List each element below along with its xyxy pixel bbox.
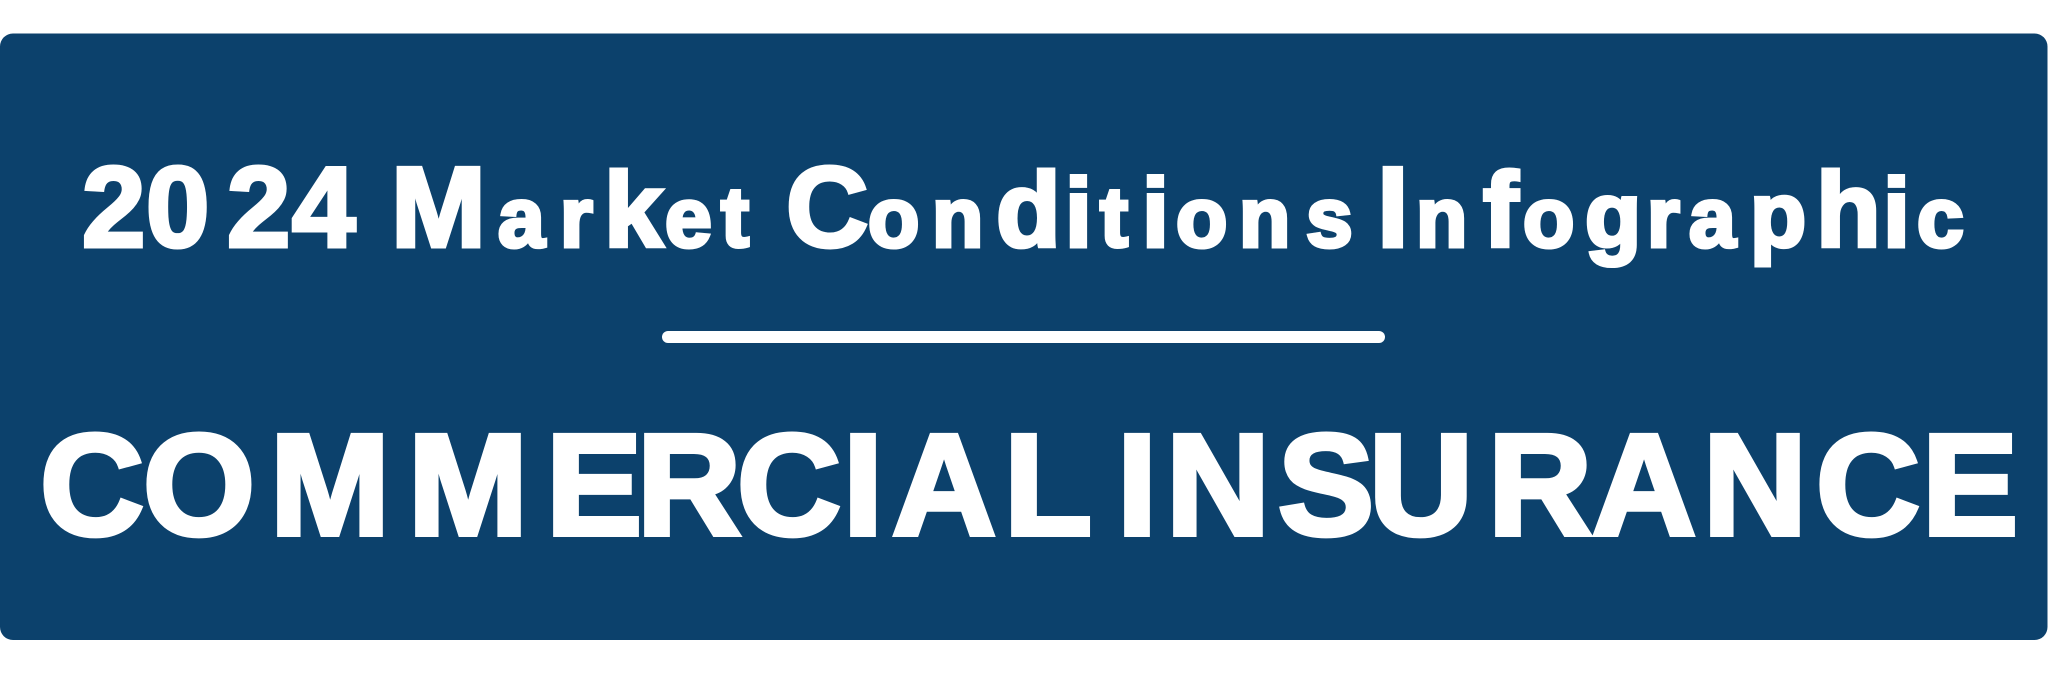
title: COMMERCIAL INSURANCE: COMMERCIAL INSURANCE: [40, 404, 2018, 566]
heading: 2024 Market Conditions Infographic: 2024 Market Conditions Infographic: [82, 144, 1964, 272]
divider rule: [662, 331, 1385, 343]
